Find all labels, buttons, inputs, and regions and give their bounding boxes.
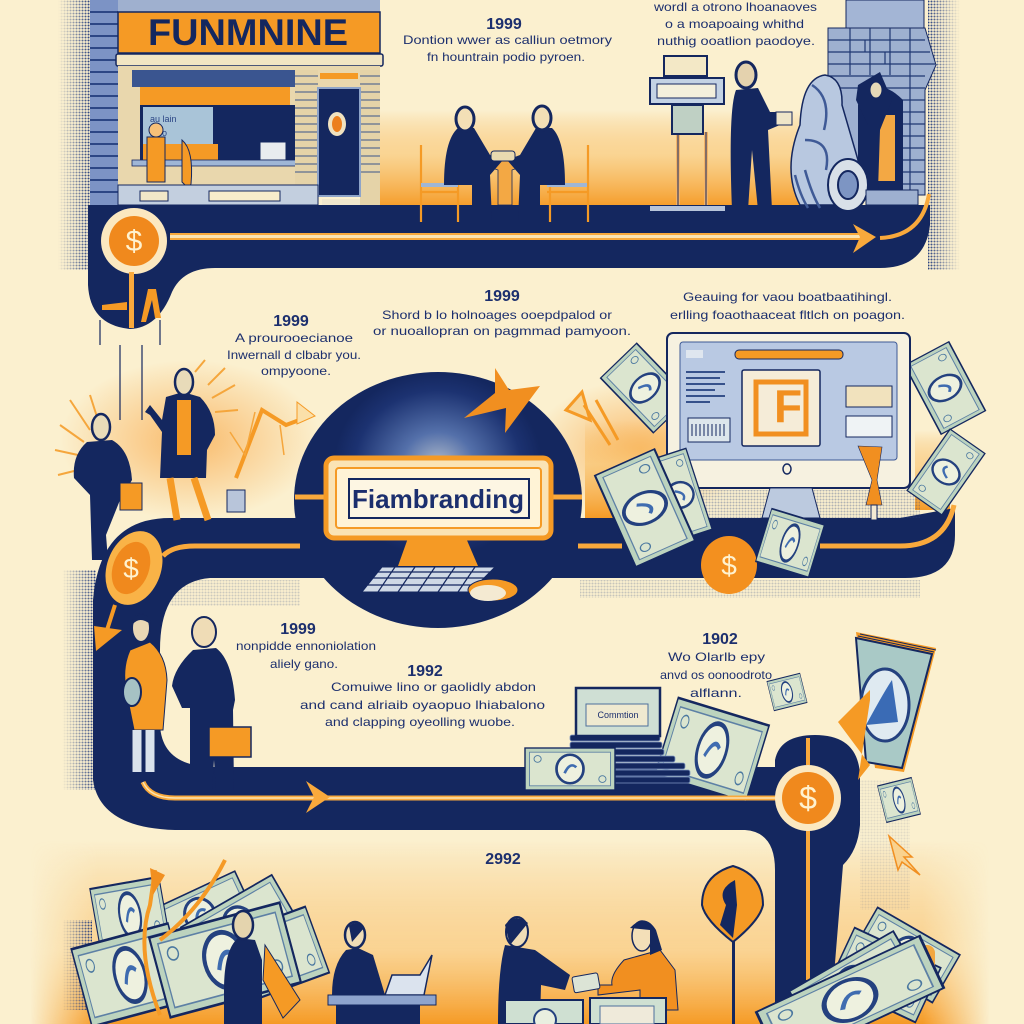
timeline road: segment 1 <box>88 205 930 329</box>
coin 2: $ <box>123 553 139 584</box>
cursor arrow <box>889 836 920 875</box>
large falling bill <box>838 632 936 780</box>
vertical orange line <box>806 738 810 980</box>
fiambranding computer <box>326 458 551 601</box>
year: 2992: 2992 <box>485 851 521 868</box>
text block: lower left: aliely gano. <box>270 657 338 671</box>
text block: middle left: A prourooecianoe <box>235 331 353 345</box>
F logo box: F <box>774 380 802 432</box>
shop window: hiuo <box>150 128 167 138</box>
rays behind figures <box>55 360 238 475</box>
logo panel <box>326 458 551 538</box>
bill stack with plates: Commtion <box>597 710 639 720</box>
woman in orange coat <box>123 614 167 772</box>
kiosk signboards <box>650 56 725 211</box>
road 3 arrow <box>143 781 776 813</box>
man with briefcase <box>172 617 251 790</box>
road sign <box>702 866 763 1024</box>
year: 1999 top centre: 1999 <box>486 16 522 33</box>
text block: lower right: Wo Olarlb epy <box>668 650 765 664</box>
text block: top right <box>653 0 817 48</box>
bottom-right bill heap <box>756 907 960 1024</box>
text block: lower left <box>236 639 376 671</box>
text block: top right: nuthig ooatlion paodoye. <box>657 34 815 48</box>
coin drop stem <box>100 272 161 420</box>
wheelchair statue <box>791 75 918 211</box>
small bill floating <box>767 673 807 711</box>
small bill below <box>877 778 921 822</box>
right coin <box>701 536 757 594</box>
plates stack <box>570 735 690 783</box>
text block: top right: o a moapoaing whithd <box>665 17 804 31</box>
man at desk <box>328 922 436 1024</box>
shop base <box>118 185 318 205</box>
coin 2 <box>96 523 172 613</box>
year: 1992 lower centre: 1992 <box>407 663 443 680</box>
text block: middle left: Inwernall d clbabr you. <box>227 348 361 362</box>
globe background <box>294 372 582 628</box>
text block: lower right <box>660 650 772 700</box>
text block: top centre <box>403 33 612 64</box>
meeting figures <box>421 106 588 222</box>
monitor <box>667 333 920 518</box>
text block: middle centre: Shord b lo holnoages ooepdpalod or <box>382 308 612 322</box>
text block: middle centre <box>373 308 631 338</box>
small arrow near monitor <box>566 392 618 445</box>
F logo box <box>742 370 820 446</box>
text block: middle left <box>227 331 361 378</box>
timeline road: segment 2 and 3 <box>93 508 955 1024</box>
road 2 arrow lines <box>163 497 954 556</box>
laptop <box>385 955 432 995</box>
text block: middle right: erlling foaothaaceat fltlch on poagon. <box>670 308 905 322</box>
text block: lower left: nonpidde ennoniolation <box>236 639 376 653</box>
bill: right diamond <box>905 342 985 434</box>
arch and person inside <box>856 72 903 195</box>
handshake man <box>498 917 570 1024</box>
left man with bag <box>74 414 142 560</box>
year: 1999 middle left: 1999 <box>273 313 309 330</box>
arrow down left <box>94 605 122 651</box>
text block: top centre: Dontion wwer as calliun oetmory <box>403 33 612 47</box>
mouse <box>468 579 518 601</box>
bills below handshake <box>505 998 666 1024</box>
year: 1902 lower right: 1902 <box>702 631 738 648</box>
shop figures <box>147 123 192 188</box>
standing man <box>224 911 300 1024</box>
shop sign: FUNMNINE <box>148 12 348 53</box>
left man <box>444 128 503 220</box>
handshake woman <box>572 920 678 1010</box>
left bill <box>525 748 615 790</box>
zigzag arrow left <box>227 402 315 512</box>
framed bill <box>576 688 660 736</box>
chairs <box>421 145 588 222</box>
coin 3: $ <box>799 780 817 816</box>
awning <box>116 54 383 66</box>
bill stack with plates <box>525 688 769 802</box>
panel: shop front <box>90 0 383 205</box>
text block: lower centre: and cand alriaib oyaopuo lhiabalono <box>300 698 545 712</box>
text block: lower right: alflann. <box>690 686 742 700</box>
text block: middle right <box>670 290 905 322</box>
table <box>472 161 538 205</box>
text block: middle left: ompyoone. <box>261 364 331 378</box>
right man <box>507 128 565 220</box>
hourglass tool <box>858 446 882 520</box>
bottom-left bill heap <box>71 860 329 1024</box>
bill: small at road <box>756 509 824 577</box>
right coin: $ <box>721 550 737 581</box>
text block: middle centre: or nuoallopran on pagmmad pamyoon. <box>373 324 631 338</box>
coin 1: $ <box>126 225 143 258</box>
road 1 arrow <box>170 194 929 253</box>
text block: top centre: fn hountrain podio pyroen. <box>427 50 585 64</box>
logo panel: Fiambranding <box>352 484 524 514</box>
tilted big bill <box>655 698 769 802</box>
coin 1 <box>101 208 167 274</box>
man handing over <box>731 62 792 210</box>
text block: middle right: Geauing for vaou boatbaatihingl. <box>683 290 892 304</box>
text block: top right: wordl a otrono lhoanaoves <box>653 0 817 14</box>
orange star arrow <box>464 368 540 433</box>
bill: lower right of monitor <box>907 429 985 515</box>
shop door <box>318 73 360 205</box>
briefcase <box>209 727 251 757</box>
year: 1999 middle centre: 1999 <box>484 288 520 305</box>
text block: lower right: anvd os oonoodroto <box>660 668 772 682</box>
keyboard <box>362 567 495 592</box>
text block: lower centre <box>300 680 545 729</box>
text block: lower centre: Comuiwe lino or gaolidly abdon <box>331 680 536 694</box>
desk <box>328 995 436 1005</box>
bill: left diamond <box>601 343 689 433</box>
text block: lower centre: and clapping oyeolling wuobe. <box>325 715 515 729</box>
year: 1999 lower left: 1999 <box>280 621 316 638</box>
shop window <box>132 87 307 166</box>
coin 3 <box>775 765 841 831</box>
shop window: au lain <box>150 114 177 124</box>
woman with apron <box>145 369 215 520</box>
stone wall <box>828 0 936 195</box>
shop side wall <box>90 0 118 205</box>
bill pile beside monitor <box>595 448 712 567</box>
